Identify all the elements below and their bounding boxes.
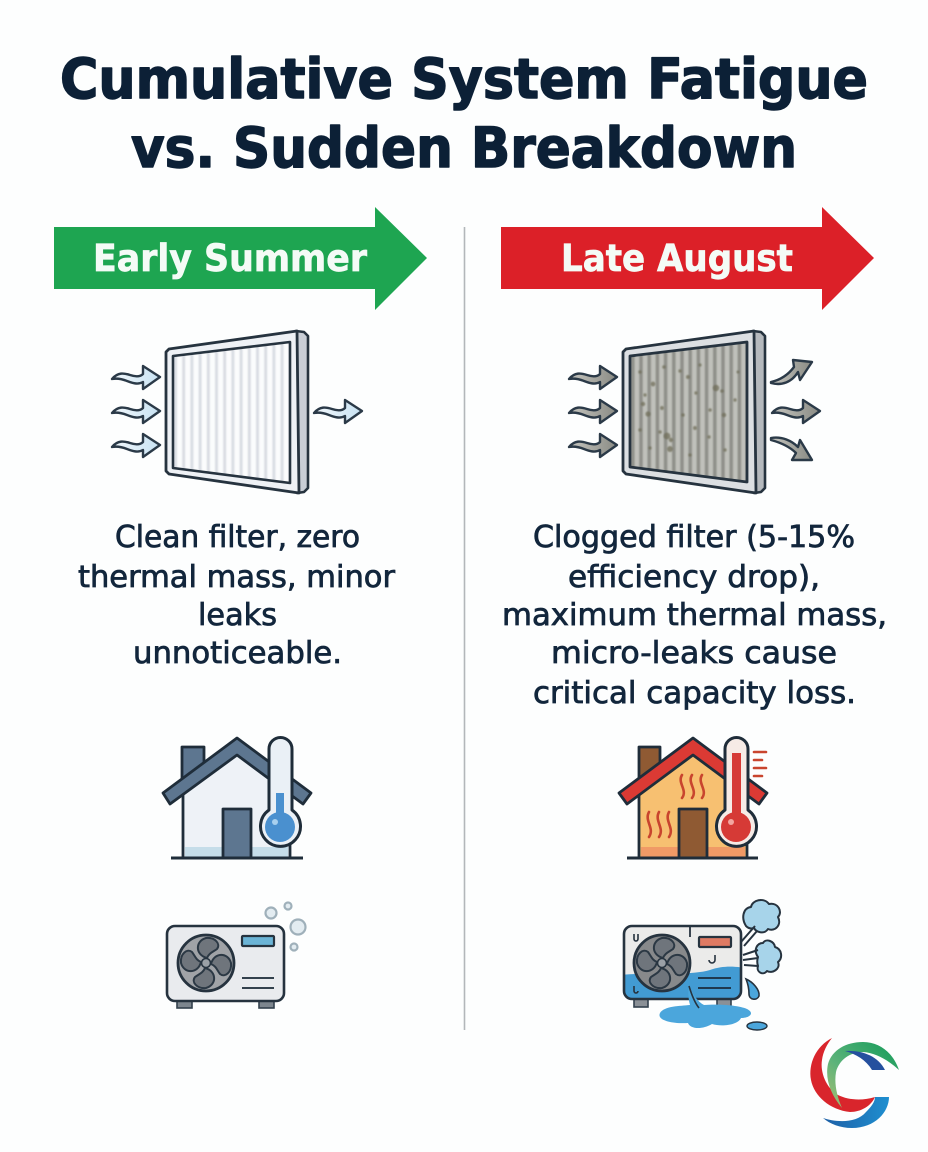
text: early summer description: thermal mass, minor: [78, 560, 396, 595]
text: late august description: maximum thermal mass,: [502, 598, 887, 633]
text: late august description: micro-leaks cause: [551, 636, 837, 671]
text: early summer description: leaks: [198, 598, 277, 633]
icon: hot house with thermometer: [619, 738, 767, 858]
clean filter frame: [166, 331, 308, 493]
icon: healthy outdoor AC unit: [167, 902, 306, 1008]
header arrow: Early Summer: [54, 207, 427, 310]
text: early summer description: Clean filter, zero: [115, 520, 360, 555]
title: [60, 47, 868, 180]
text: early summer description: [78, 520, 396, 671]
heat waves: [648, 752, 766, 837]
text: late august description: [502, 520, 887, 711]
icon: clogged filter with weak airflow: [569, 331, 820, 493]
text: early summer description: unnoticeable.: [133, 636, 342, 671]
icon: clean filter with airflow: [112, 331, 362, 493]
text: late august description: Clogged filter (5-15%: [533, 520, 855, 555]
icon: leaking outdoor AC unit: [620, 900, 781, 1030]
logo: [810, 1038, 899, 1128]
text: late august description: critical capacity loss.: [533, 676, 856, 711]
clean airflow arrows: [112, 366, 362, 457]
air bubbles: [266, 902, 306, 950]
icon: cool house with thermometer: [163, 738, 311, 858]
clogged filter frame: [623, 331, 765, 493]
thermometer cold: [260, 738, 300, 846]
steam clouds: [741, 900, 781, 973]
header arrow: Late August: Late August: [561, 237, 793, 280]
water puddle: [659, 979, 767, 1030]
header arrow: Early Summer: Early Summer: [93, 237, 368, 280]
header arrow: Late August: [501, 207, 874, 310]
thermometer hot: [717, 738, 756, 846]
text: late august description: efficiency drop),: [568, 560, 820, 595]
clogged airflow arrows: [569, 360, 820, 460]
title: vs. Sudden Breakdown: [131, 116, 797, 180]
title: Cumulative System Fatigue: [60, 47, 868, 111]
